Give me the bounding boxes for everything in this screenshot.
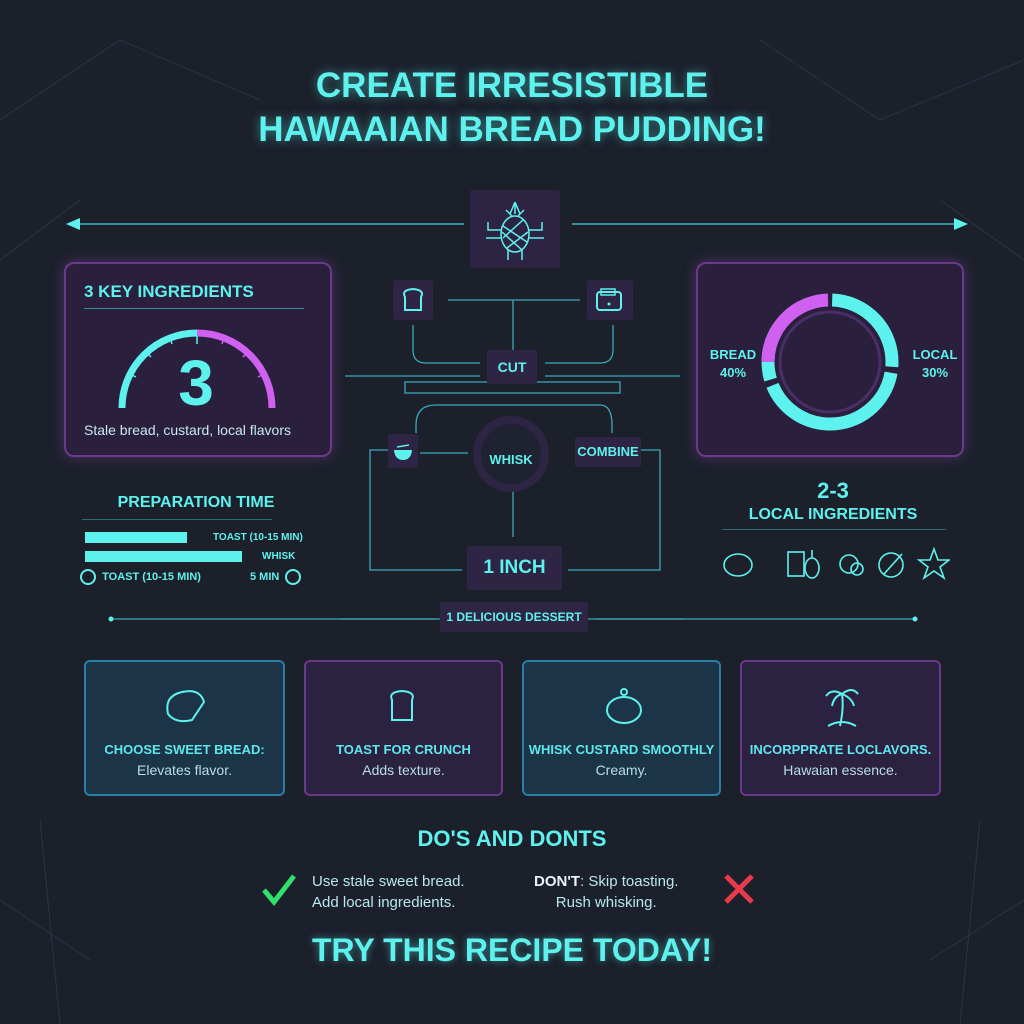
preparation time: WHISK: [262, 551, 295, 562]
icon: cross: [724, 874, 754, 904]
heading: do's and donts: DO'S AND DONTS: [418, 826, 606, 851]
card: incorporate local flavors: Hawaian essence.: [783, 762, 898, 778]
flowchart: [340, 280, 685, 632]
local ingredients: LOCAL INGREDIENTS: [749, 506, 917, 523]
title: [254, 66, 768, 149]
card: incorporate local flavors: INCORPPRATE LOCLAVORS.: [750, 742, 931, 757]
preparation time: 5 MIN: [250, 571, 279, 583]
bar: toast: [85, 532, 187, 543]
COMBINE: [575, 437, 641, 467]
icons: ingredients: [723, 546, 950, 580]
gauge: [118, 330, 276, 408]
card: whisk custard: WHISK CUSTARD SMOOTHLY: [529, 742, 714, 757]
panel: donut chart: 30%: [922, 365, 948, 380]
whisk circle: [473, 416, 549, 492]
local ingredients: [722, 478, 950, 580]
do list: Use stale sweet bread.: [312, 873, 465, 890]
card: whisk custard: Creamy.: [596, 762, 647, 778]
panel: 3 key ingredients: 3: [178, 347, 214, 419]
bar: whisk: [85, 551, 242, 562]
panel: 3 key ingredients: Stale bread, custard, local flavors: [84, 422, 291, 438]
preparation time: PREPARATION TIME: [118, 494, 274, 511]
icon: bread slice: [393, 280, 433, 320]
title: HAWAAIAN BREAD PUDDING!: [258, 110, 766, 149]
preparation time: TOAST (10-15 MIN): [102, 571, 201, 583]
card: incorporate local flavors: [740, 660, 941, 796]
CUT: [487, 350, 537, 384]
card: whisk custard: [522, 660, 721, 796]
dont list: [534, 873, 678, 911]
card: choose sweet bread: Elevates flavor.: [137, 762, 232, 778]
card: choose sweet bread: CHOOSE SWEET BREAD:: [104, 742, 265, 757]
dont list: DON'T: Skip toasting.: [534, 873, 678, 890]
preparation time: [80, 494, 303, 585]
COMBINE: COMBINE: [577, 444, 639, 459]
CUT: CUT: [498, 359, 526, 375]
do list: Add local ingredients.: [312, 894, 455, 911]
1 DELICIOUS DESSERT: [440, 602, 588, 632]
panel: 3 key ingredients: [64, 262, 332, 457]
preparation time: TOAST (10-15 MIN): [213, 532, 303, 543]
card: choose sweet bread: [84, 660, 285, 796]
arrow: top left: [66, 218, 464, 230]
local ingredients: 2-3: [817, 478, 849, 503]
title: CREATE IRRESISTIBLE: [316, 66, 708, 105]
1 DELICIOUS DESSERT: 1 DELICIOUS DESSERT: [446, 610, 582, 624]
panel: donut chart: BREAD: [710, 347, 756, 362]
icon: bowl: [388, 434, 418, 468]
call to action: TRY THIS RECIPE TODAY!: [312, 932, 712, 968]
icon: pineapple chip: [470, 190, 560, 268]
card: toast for crunch: Adds texture.: [362, 762, 445, 778]
card: toast for crunch: [304, 660, 503, 796]
arrow: top right: [572, 218, 968, 230]
1 INCH: [467, 546, 562, 590]
whisk circle: WHISK: [489, 452, 533, 467]
panel: donut chart: [696, 262, 964, 457]
icon: toaster: [587, 280, 633, 320]
dont list: Rush whisking.: [556, 894, 657, 911]
card: toast for crunch: TOAST FOR CRUNCH: [336, 742, 471, 757]
icon: check: [262, 874, 296, 906]
panel: 3 key ingredients: 3 KEY INGREDIENTS: [84, 282, 254, 301]
panel: donut chart: LOCAL: [913, 347, 957, 362]
panel: donut chart: 40%: [720, 365, 746, 380]
1 INCH: 1 INCH: [483, 557, 546, 578]
do list: [312, 873, 465, 911]
line: dessert: [108, 616, 918, 622]
